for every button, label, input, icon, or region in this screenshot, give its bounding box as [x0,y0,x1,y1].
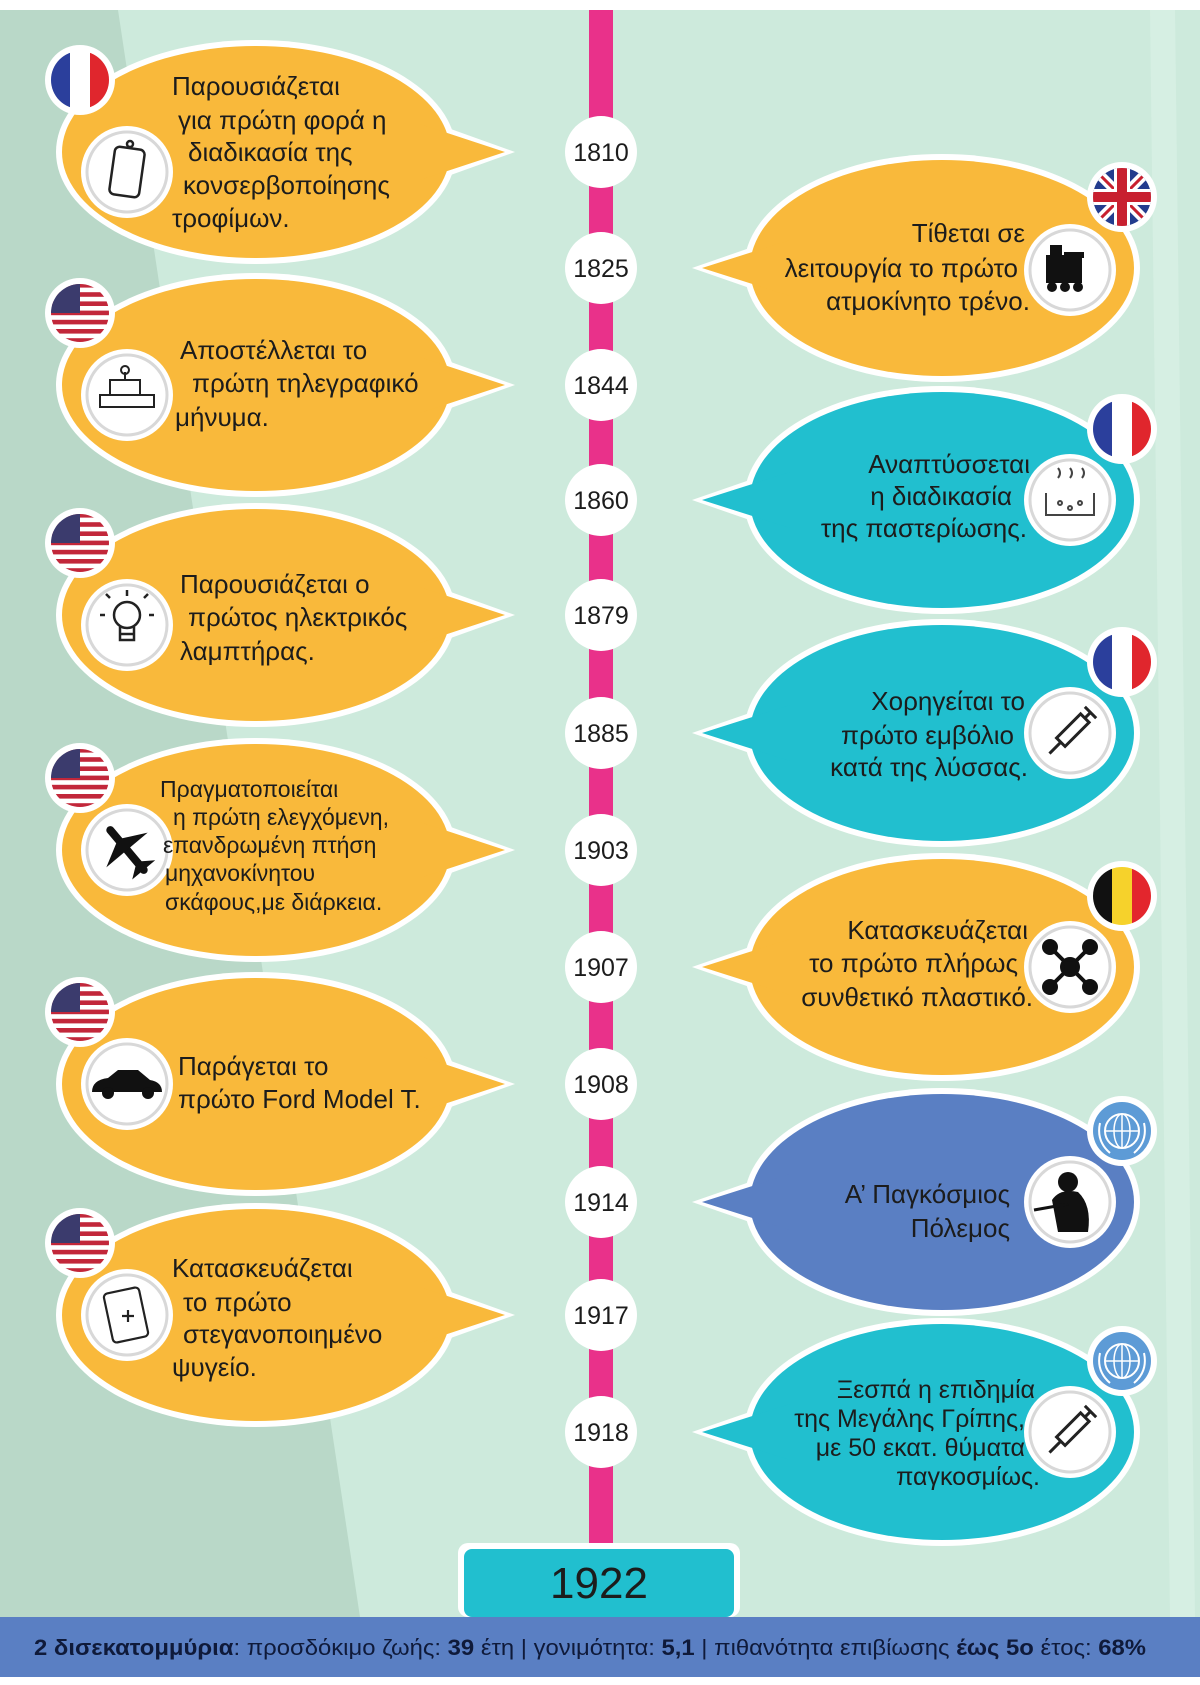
year markers: 1879 [573,602,629,630]
year markers: 1907 [573,954,629,982]
bubble left: 1908 Ford: πρώτο Ford Model T. [178,1084,421,1114]
year markers: 1914 [573,1189,629,1217]
icon: molecule [1044,941,1096,993]
bubble left: 1810 canning: τροφίμων. [172,203,290,233]
bubble right: 1885 rabies vaccine: Χορηγείται το [871,686,1025,716]
end year box 1922 [458,1543,740,1617]
bubble right: 1825 train: ατμοκίνητο τρένο. [826,286,1030,316]
icon: bulb [100,590,154,640]
bubble left: 1917 fridge: Κατασκευάζεται [172,1253,353,1283]
bubble right: 1914 WWI [692,1088,1157,1316]
bubble left: 1844 telegraph: Αποστέλλεται το [180,335,367,365]
bubble left: 1917 fridge: το πρώτο [183,1287,292,1317]
year markers: 1917 [573,1302,629,1330]
bubble left: 1879 light bulb [45,503,515,727]
year markers: 1903 [573,837,629,865]
bubble left: 1903 flight: σκάφους,με διάρκεια. [165,889,382,915]
bubble left: 1908 Ford: Παράγεται το [178,1051,329,1081]
bubble right: 1885 rabies vaccine: πρώτο εμβόλιο [841,720,1014,750]
icon: airplane [87,810,167,890]
bubble right: 1907 plastic [692,853,1157,1081]
bubble left: 1879 light bulb: πρώτος ηλεκτρικός [188,602,407,632]
icon: telegraph [100,366,154,407]
bubble right: 1918 flu: με 50 εκατ. θύματα [816,1434,1025,1462]
bubble right: 1907 plastic: το πρώτο πλήρως [809,948,1018,978]
bubble right: 1825 train: λειτουργία το πρώτο [785,253,1018,283]
bubble left: 1903 flight: μηχανοκίνητου [165,860,315,886]
year markers: 1918 [573,1419,629,1447]
bubble left: 1908 Ford [45,972,515,1196]
bubble left: 1917 fridge: στεγανοποιημένο [183,1319,382,1349]
bubble right: 1918 flu [692,1318,1157,1546]
year markers: 1908 [573,1071,629,1099]
icon: soldier [1034,1172,1089,1232]
bubble right: 1907 plastic: Κατασκευάζεται [847,915,1028,945]
end year box 1922: 1922 [550,1559,648,1608]
bubble right: 1860 pasteurisation: Αναπτύσσεται [868,449,1030,479]
bubble left: 1917 fridge: ψυγείο. [172,1352,257,1382]
bubble left: 1903 flight [45,738,515,962]
icon: syringe [1044,707,1096,759]
bubble right: 1918 flu: παγκοσμίως. [896,1463,1040,1491]
icon: fridge [103,1287,149,1343]
year markers: 1810 [573,139,629,167]
bubble left: 1844 telegraph [45,273,515,497]
year markers: 1844 [573,372,629,400]
bubble right: 1825 train [692,154,1157,382]
bubble right: 1860 pasteurisation: της παστερίωσης. [821,513,1027,543]
bubble right: 1885 rabies vaccine [692,619,1157,847]
bubble right: 1914 WWI: Α’ Παγκόσμιος [845,1179,1010,1209]
bubble left: 1903 flight: Πραγματοποιείται [160,776,338,802]
bubble left: 1844 telegraph: πρώτη τηλεγραφικό [192,368,419,398]
bubble right: 1825 train: Τίθεται σε [912,218,1025,248]
bubble left: 1810 canning: για πρώτη φορά η [178,105,386,135]
icon: train [1046,245,1084,292]
bottom statistics band [0,1617,1200,1677]
bubble left: 1917 fridge [45,1203,515,1427]
bubble left: 1879 light bulb: λαμπτήρας. [180,636,315,666]
year markers: 1885 [573,720,629,748]
bubble left: 1810 canning [45,40,515,264]
bubble left: 1903 flight: η πρώτη ελεγχόμενη, [173,804,389,830]
icon: car [92,1070,162,1099]
icon: syringe [1044,1406,1096,1458]
bubble left: 1903 flight: επανδρωμένη πτήση [163,832,376,858]
bubble right: 1918 flu: της Μεγάλης Γρίπης, [794,1405,1025,1433]
bubble right: 1918 flu: Ξεσπά η επιδημία [837,1376,1035,1404]
bubble right: 1860 pasteurisation: η διαδικασία [870,481,1012,511]
bubble right: 1860 pasteurisation [692,386,1157,614]
bubble right: 1907 plastic: συνθετικό πλαστικό. [801,982,1033,1012]
bottom statistics band: 2 δισεκατομμύρια : προσδόκιμο ζωής: 39 έτη | γονιμότητα: 5,1 | πιθανότητα επιβίωσης έως 5ο έτος: 68% [34,1635,1146,1660]
bubble left: 1810 canning: Παρουσιάζεται [172,71,340,101]
icon: pot steam [1046,468,1094,515]
timeline line [589,10,613,1555]
year markers [565,116,637,1468]
bubble left: 1844 telegraph: μήνυμα. [175,402,269,432]
icon: can [109,141,145,198]
bubble left: 1879 light bulb: Παρουσιάζεται ο [180,569,370,599]
bubble left: 1810 canning: διαδικασία της [188,137,353,167]
bubble right: 1885 rabies vaccine: κατά της λύσσας. [830,752,1028,782]
year markers: 1825 [573,255,629,283]
bubble right: 1914 WWI: Πόλεμος [911,1213,1010,1243]
bubble left: 1810 canning: κονσερβοποίησης [183,170,390,200]
year markers: 1860 [573,487,629,515]
